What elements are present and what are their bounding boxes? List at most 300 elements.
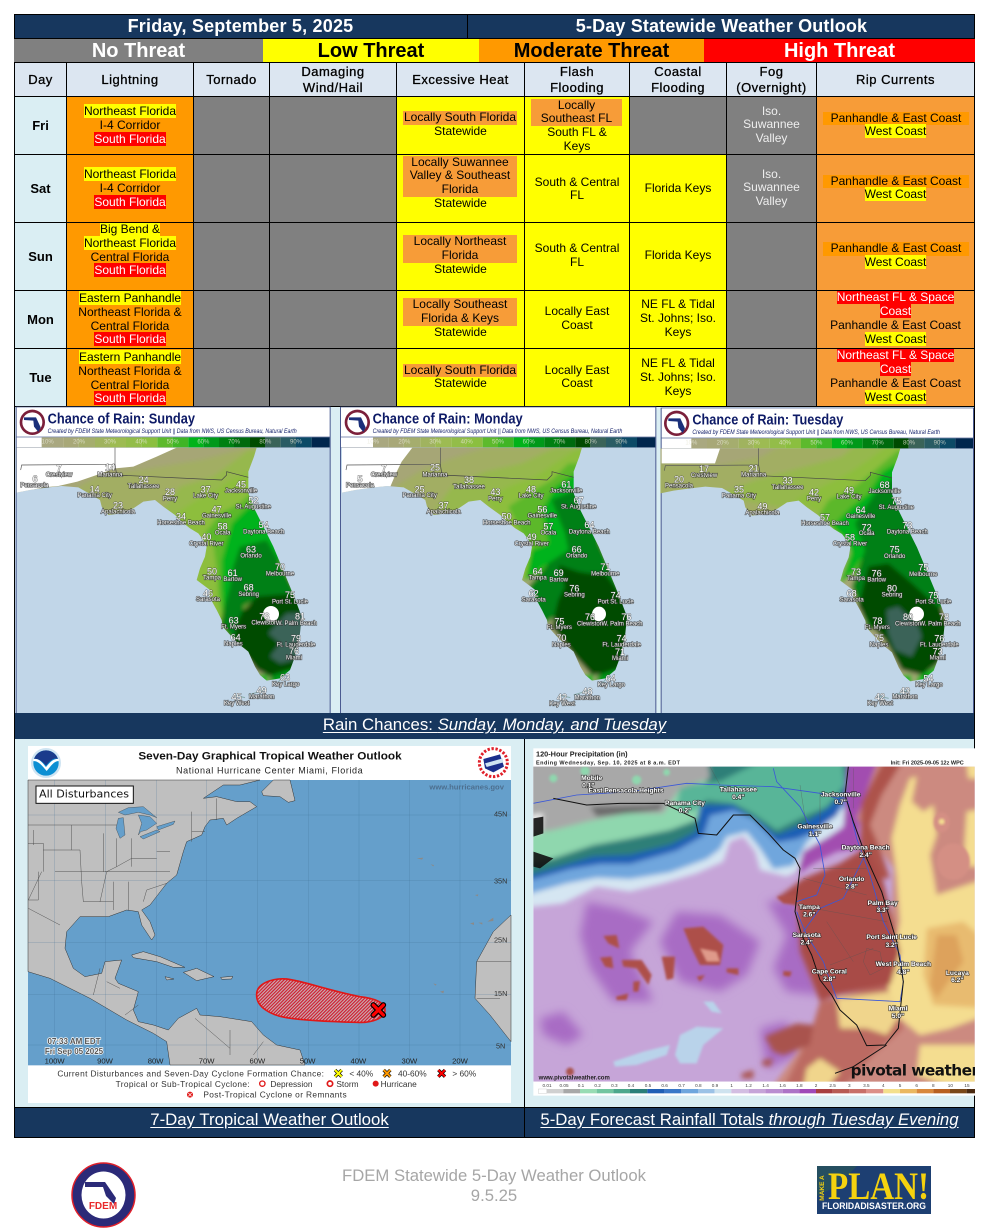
city rain labels: Marathon [575, 695, 600, 701]
threat table: Northeast Florida & [78, 305, 182, 319]
threat table: Locally East [545, 304, 609, 318]
threat table: Valley [756, 194, 787, 208]
city rain labels: 25 [415, 484, 425, 494]
threat table: Statewide [434, 196, 487, 210]
all disturbances box [36, 786, 133, 803]
city rain labels: 54 [259, 520, 269, 530]
threat table [14, 62, 975, 407]
precipitation scale: 0.6 [661, 1083, 668, 1088]
city rain labels: 42 [557, 693, 567, 703]
precipitation scale: 10 [948, 1083, 953, 1088]
threat table: Flooding [550, 80, 604, 94]
map: atlantic basin: 15N [494, 989, 507, 998]
city rain labels: Apalachicola [745, 510, 780, 516]
city rain labels: Crestview [691, 473, 718, 479]
rain percentage legend: 90% [615, 439, 628, 445]
map: florida rain chance [325, 433, 655, 713]
city rain labels: 66 [572, 544, 582, 554]
threat table: South & Central [535, 241, 619, 255]
outlook legend: Hurricane [381, 1079, 417, 1089]
timestamp: Fri Sep 05 2025 [45, 1047, 104, 1056]
threat table: Coastal [654, 64, 702, 79]
city rain labels: 56 [537, 504, 547, 514]
outlook legend: Storm [336, 1079, 359, 1089]
threat table: Panhandle & East Coast [831, 110, 961, 124]
no threat: No Threat [92, 40, 185, 62]
rain percentage legend: 60% [523, 439, 535, 445]
threat table: I-4 Corridor [100, 181, 160, 195]
outlook legend: Depression [270, 1079, 313, 1089]
city rainfall labels: 6.2" [951, 977, 964, 984]
city rain labels: 23 [113, 501, 123, 511]
city rain labels: Ft. Lauderdale [920, 643, 959, 649]
threat table: Suwannee [743, 117, 800, 131]
city rain labels: 33 [783, 476, 793, 486]
precipitation heading [536, 750, 964, 766]
precipitation scale: 5 [899, 1083, 902, 1088]
threat table: South FL & [547, 125, 607, 139]
rain percentage legend: 20% [73, 439, 86, 445]
city rain labels: 75 [554, 616, 564, 626]
precipitation scale: 3.5 [863, 1083, 870, 1088]
high threat: High Threat [784, 40, 895, 62]
precipitation scale: 0.05 [559, 1083, 569, 1088]
city rain labels: St. Augustine [879, 505, 915, 511]
city rain labels: Miami [930, 656, 946, 662]
city rain labels: Crystal River [514, 541, 549, 547]
city rain labels: Tallahassee [453, 484, 486, 490]
city rain labels: 17 [699, 464, 709, 474]
city rain labels: 21 [749, 463, 759, 473]
city rainfall labels: Port Saint Lucie [866, 934, 917, 941]
moderate threat [479, 39, 704, 62]
city rain labels: Key West [224, 701, 250, 707]
city rain labels: Gainesville [528, 513, 558, 519]
city rain labels: 42 [875, 692, 885, 702]
city rain labels: 61 [228, 568, 238, 578]
city rain labels: Lake City [836, 494, 862, 500]
rain percentage legend: 70% [553, 439, 566, 445]
threat table: Lightning [101, 72, 159, 87]
map: atlantic basin: 35N [494, 876, 507, 885]
precipitation scale [538, 1083, 975, 1093]
precipitation scale: 0.3 [611, 1083, 618, 1088]
threat table: Sat [30, 181, 51, 196]
city rain labels: 6 [32, 474, 38, 484]
rain percentage legend: 50% [492, 439, 505, 445]
icon: red x formation marker [373, 1005, 383, 1015]
city rain labels: Perry [807, 497, 821, 503]
city rain labels: 20 [674, 474, 684, 484]
city rain labels: Marianna [741, 473, 767, 479]
rain percentage legend: 80% [585, 439, 597, 445]
outlook title: Seven-Day Graphical Tropical Weather Outlook [138, 750, 402, 762]
city rain labels: Clewiston [251, 621, 277, 627]
city rain labels: 48 [526, 485, 536, 495]
city rain labels: Melbourne [909, 572, 938, 578]
map credit: Created by FDEM State Meteorological Support Unit || Data from NWS, US Census Bureau, Natural Earth [48, 429, 297, 435]
city rain labels: 74 [611, 591, 621, 601]
threat table: Eastern Panhandle [79, 291, 181, 305]
city rainfall labels: 4.8" [897, 969, 910, 976]
threat table: FL [570, 188, 584, 202]
caption: tropical outlook: 7-Day Tropical Weather Outlook [150, 1110, 389, 1129]
rain percentage legend: 40% [461, 439, 473, 445]
city rain labels: 63 [229, 616, 239, 626]
city rain labels: 78 [259, 612, 269, 622]
rain percentage legend: 20% [717, 440, 729, 446]
city rain labels: Port St. Lucie [272, 599, 309, 605]
threat table: Wind/Hail [303, 80, 363, 94]
city rain labels: 74 [617, 634, 627, 644]
threat table: Locally East [545, 362, 609, 376]
threat table: Coast [880, 362, 911, 376]
city rain labels: Melbourne [591, 572, 620, 578]
threat table: Central Florida [91, 319, 169, 333]
icon: FDEM seal [20, 410, 45, 435]
rain percentage legend: 60% [197, 439, 210, 445]
threat table: South & Central [535, 174, 619, 188]
caption: tropical outlook [14, 1107, 525, 1138]
city rain labels: 67 [574, 495, 584, 505]
city rain labels: Sarasota [196, 597, 221, 603]
threat table: Statewide [434, 124, 487, 138]
city rainfall labels: 2.8" [823, 976, 836, 983]
threat table: Florida & Keys [421, 311, 499, 325]
precipitation scale: 0.9 [712, 1083, 719, 1088]
date heading [14, 15, 468, 38]
city rain labels: Bartow [223, 577, 243, 583]
threat table: Florida Keys [645, 181, 711, 195]
city rain labels: Crystal River [189, 541, 224, 547]
map title: Chance of Rain: Monday [373, 411, 523, 427]
city rain labels: 49 [257, 686, 267, 696]
rain percentage legend: 80% [903, 440, 916, 446]
city rain labels: 37 [201, 485, 211, 495]
rain percentage legend: 60% [841, 440, 854, 446]
city rain labels: 50 [502, 512, 512, 522]
city rain labels: Panama City [722, 493, 756, 499]
threat table: South Florida [94, 332, 166, 346]
city rain labels: 73 [902, 521, 912, 531]
threat table: Flooding [651, 80, 705, 94]
map credit: Created by FDEM State Meteorological Support Unit || Data from NWS, US Census Bureau, Natural Earth [692, 430, 941, 436]
threat table: Flash [560, 64, 594, 79]
city rain labels: 64 [533, 567, 543, 577]
city rain labels: Marathon [249, 695, 274, 701]
city rain labels: Horseshoe Beach [483, 521, 531, 527]
city rain labels: Crystal River [833, 542, 867, 548]
map credit: Created by FDEM State Meteorological Support Unit || Data from NWS, US Census Bureau, Natural Earth [373, 429, 623, 435]
city rain labels: Jacksonville [550, 488, 583, 494]
city rain labels: 50 [207, 567, 217, 577]
city rain labels: Ocala [859, 531, 875, 537]
footer text: FDEM Statewide 5-Day Weather Outlook [342, 1166, 646, 1185]
caption: rain chances [14, 713, 975, 739]
precipitation scale: 0.01 [542, 1083, 552, 1088]
city rain labels: 72 [862, 522, 872, 532]
high threat [704, 39, 975, 62]
threat table: Day [28, 72, 53, 87]
city rainfall labels: West Palm Beach [876, 961, 931, 968]
city rain labels: 78 [939, 612, 949, 622]
map title: Chance of Rain: Sunday [48, 411, 196, 427]
city rain labels: Daytona Beach [887, 530, 928, 536]
city rain labels: Panama City [402, 493, 437, 499]
city rain labels: 64 [584, 520, 594, 530]
city rain labels: 64 [231, 632, 241, 642]
map title: Chance of Rain: Tuesday [692, 412, 844, 428]
rain percentage legend [662, 438, 973, 448]
precipitation scale: 0.2 [594, 1083, 601, 1088]
map: atlantic basin: 50W [300, 1056, 316, 1065]
threat table: Locally Southeast [413, 297, 507, 311]
city rain labels: 45 [232, 692, 242, 702]
icon: FDEM seal [664, 411, 689, 436]
map: atlantic basin [28, 780, 511, 1065]
threat table: Northeast Florida & [78, 364, 182, 378]
city rain labels: 75 [891, 496, 901, 506]
city rainfall labels [581, 775, 969, 1020]
city rain labels: 76 [289, 646, 299, 656]
panel: chance of rain monday [340, 406, 656, 713]
city rainfall labels: Tampa [799, 904, 820, 911]
threat table: St. Johns; Iso. [640, 370, 716, 384]
threat table: Valley [756, 131, 787, 145]
rain percentage legend: 10% [42, 439, 54, 445]
city rainfall labels: 0.2" [679, 808, 691, 814]
threat table: Locally [558, 98, 595, 112]
city rain labels: Bartow [549, 577, 569, 583]
threat table: Sun [28, 249, 53, 264]
city rain labels: Sarasota [522, 597, 546, 603]
precipitation scale: 0.1 [578, 1083, 585, 1088]
city rain labels: 75 [918, 563, 928, 573]
threat table: Northeast Florida [84, 104, 176, 118]
city rain labels: 78 [872, 616, 882, 626]
threat table: Iso. [762, 104, 781, 118]
precipitation scale: 3 [848, 1083, 851, 1088]
city rain labels: Crestview [46, 472, 73, 478]
threat table: Valley & Southeast [410, 168, 510, 182]
map: atlantic basin: 60W [249, 1056, 266, 1065]
city rain labels: 63 [246, 544, 256, 554]
footer text: 9.5.25 [471, 1186, 517, 1204]
moderate threat: Moderate Threat [514, 40, 669, 62]
icon: make a plan logo: MAKE A [819, 1175, 826, 1201]
icon: NOAA logo [31, 748, 61, 778]
title bar [14, 14, 975, 39]
city rainfall labels: Orlando [839, 876, 864, 883]
precipitation scale: 1.6 [779, 1083, 786, 1088]
icon: FDEM logo: FDEM [89, 1201, 117, 1212]
city rain labels: 46 [203, 588, 213, 598]
city rainfall labels: 3.3" [876, 907, 889, 914]
city rain labels: 79 [291, 633, 301, 643]
threat table: Florida [442, 248, 478, 262]
city rain labels: 75 [928, 591, 938, 601]
threat table: South Florida [94, 195, 166, 209]
threat table: Florida Keys [645, 248, 711, 262]
city rainfall labels: East Pensacola Heights [588, 788, 664, 794]
city rain labels: 14 [90, 484, 100, 494]
city rainfall labels: Sarasota [793, 932, 821, 939]
city rain labels: Panama City [77, 493, 112, 499]
outlook legend [57, 1068, 477, 1100]
city rain labels: Key Largo [272, 682, 300, 688]
city rain labels: Bartow [867, 578, 887, 584]
city rain labels: Tampa [529, 576, 547, 582]
city rain labels: 58 [845, 532, 855, 542]
threat table: South Florida [94, 263, 166, 277]
threat table: Panhandle & East Coast [830, 376, 961, 390]
map: atlantic basin: 70W [199, 1056, 215, 1065]
city rain labels: 25 [430, 463, 440, 473]
city rain labels: Horseshoe Beach [157, 521, 205, 527]
city rain labels: 7 [381, 463, 387, 473]
rain percentage legend: 50% [167, 439, 179, 445]
city rainfall labels: Panama City [665, 800, 705, 807]
threat table: Suwannee [743, 180, 800, 194]
city rain labels: Pensacola [665, 483, 694, 489]
city rainfall labels: Lucaya [946, 970, 969, 977]
city rainfall labels: Cape Coral [812, 968, 847, 976]
threat table: Mon [27, 312, 54, 327]
precipitation heading: Ending Wednesday, Sep. 10, 2025 at 8 a.m. EDT [536, 760, 681, 766]
city rain labels: 71 [615, 647, 625, 657]
threat table: West Coast [865, 255, 926, 269]
date heading: Friday, September 5, 2025 [128, 16, 353, 36]
all disturbances box: All Disturbances [39, 788, 129, 801]
city rain labels: Marianna [422, 472, 448, 478]
website credit: www.pivotalweather.com [538, 1075, 610, 1081]
precipitation scale: 0.5 [645, 1083, 652, 1088]
threat table: NE FL & Tidal [641, 297, 715, 311]
city rainfall labels: 0.4" [732, 794, 745, 801]
city rain labels: 68 [244, 583, 254, 593]
city rain labels: 61 [561, 479, 571, 489]
city rain labels: 68 [880, 480, 890, 490]
threat legend [14, 39, 975, 62]
map: atlantic basin: 5N [496, 1041, 505, 1050]
outlook heading: 5-Day Statewide Weather Outlook [576, 16, 867, 36]
threat table: West Coast [865, 124, 926, 138]
city rain labels: Perry [488, 496, 503, 502]
city rainfall labels: Palm Bay [868, 900, 898, 907]
city rain labels: Naples [870, 642, 888, 648]
precipitation scale: 1.4 [762, 1083, 769, 1088]
threat table: Statewide [434, 325, 487, 339]
city rain labels: Ft. Myers [221, 625, 246, 631]
city rain labels: Key West [867, 701, 893, 707]
city rain labels: 47 [212, 504, 222, 514]
city rain labels: Apalachicola [101, 510, 136, 516]
city rain labels: 70 [556, 633, 566, 643]
city rain labels: Ft. Lauderdale [602, 643, 642, 649]
city rainfall labels: 0.1" [582, 782, 595, 790]
threat table: NE FL & Tidal [641, 356, 715, 370]
threat table: Iso. [762, 166, 781, 180]
outlook legend: Tropical or Sub-Tropical Cyclone: [116, 1079, 250, 1089]
city rain labels: Clewiston [895, 621, 921, 627]
rain percentage legend: 90% [934, 440, 946, 446]
threat table: Fog [760, 64, 783, 79]
threat table: Panhandle & East Coast [830, 318, 961, 332]
city rain labels: Lake City [193, 494, 218, 500]
panel: 120-hour precipitation map [533, 748, 975, 1096]
city rain labels: Sebring [564, 593, 585, 599]
low threat: Low Threat [318, 40, 424, 62]
city rain labels: 75 [874, 633, 884, 643]
panel: tropical outlook background [14, 739, 525, 1107]
threat table: Central Florida [91, 378, 169, 392]
precipitation heading: 120-Hour Precipitation (in) [536, 750, 628, 759]
city rainfall labels: 1.1" [809, 831, 821, 838]
threat table: Locally South Florida [404, 362, 516, 376]
rain percentage legend: 30% [429, 439, 442, 445]
city rain labels [20, 463, 317, 707]
precipitation scale: 0.8 [695, 1083, 702, 1088]
city rainfall labels: 0.7" [834, 799, 847, 806]
city rain labels: Horseshoe Beach [801, 521, 849, 527]
city rain labels: 73 [933, 647, 943, 657]
threat table: FL [570, 255, 584, 269]
city rainfall labels: Tallahassee [720, 786, 757, 794]
city rain labels: Naples [552, 642, 571, 648]
city rain labels: Ft. Myers [547, 625, 572, 631]
rain percentage legend: 20% [398, 439, 411, 445]
threat table: Fri [32, 118, 49, 133]
rain percentage legend: 10% [367, 439, 380, 445]
threat table: Locally South Florida [404, 110, 516, 124]
city rain labels: Sarasota [840, 597, 864, 603]
city rain labels: Sebring [238, 592, 259, 598]
city rain labels: 76 [569, 583, 579, 593]
city rainfall labels: 5.0" [892, 1013, 904, 1020]
outlook legend: Post-Tropical Cyclone or Remnants [203, 1090, 347, 1100]
city rain labels: Tallahassee [772, 485, 804, 491]
threat table: Tornado [206, 72, 257, 87]
city rain labels: 64 [856, 505, 866, 515]
icon: FDEM logo [71, 1162, 136, 1228]
timestamp [45, 1037, 104, 1056]
city rain labels: 75 [285, 590, 295, 600]
outlook legend: 40-60% [398, 1068, 427, 1078]
precipitation scale: 4 [882, 1083, 885, 1088]
city rain labels: Clewiston [577, 621, 603, 627]
panel: chance of rain sunday [16, 406, 331, 713]
city rainfall labels: Miami [889, 1006, 908, 1012]
city rain labels: 52 [248, 495, 258, 505]
map header [662, 408, 973, 438]
city rain labels: 81 [295, 612, 305, 622]
city rain labels: 48 [582, 687, 592, 697]
threat table: West Coast [865, 187, 926, 201]
rain percentage legend: 30% [748, 440, 760, 446]
city rainfall labels: Jacksonville [821, 792, 861, 798]
city rainfall labels: 2.8" [845, 884, 858, 890]
threat table: Keys [665, 325, 691, 339]
map: atlantic basin: 100W [45, 1056, 65, 1065]
map: atlantic basin: 20W [452, 1056, 469, 1065]
city rain labels: Pensacola [346, 483, 375, 489]
city rainfall labels: 2.4" [800, 940, 813, 946]
threat table: Panhandle & East Coast [831, 174, 961, 188]
rain percentage legend: 80% [259, 439, 272, 445]
map: atlantic basin: 30W [401, 1056, 418, 1065]
threat table: Damaging [301, 64, 365, 79]
city rain labels: Perry [163, 496, 177, 502]
